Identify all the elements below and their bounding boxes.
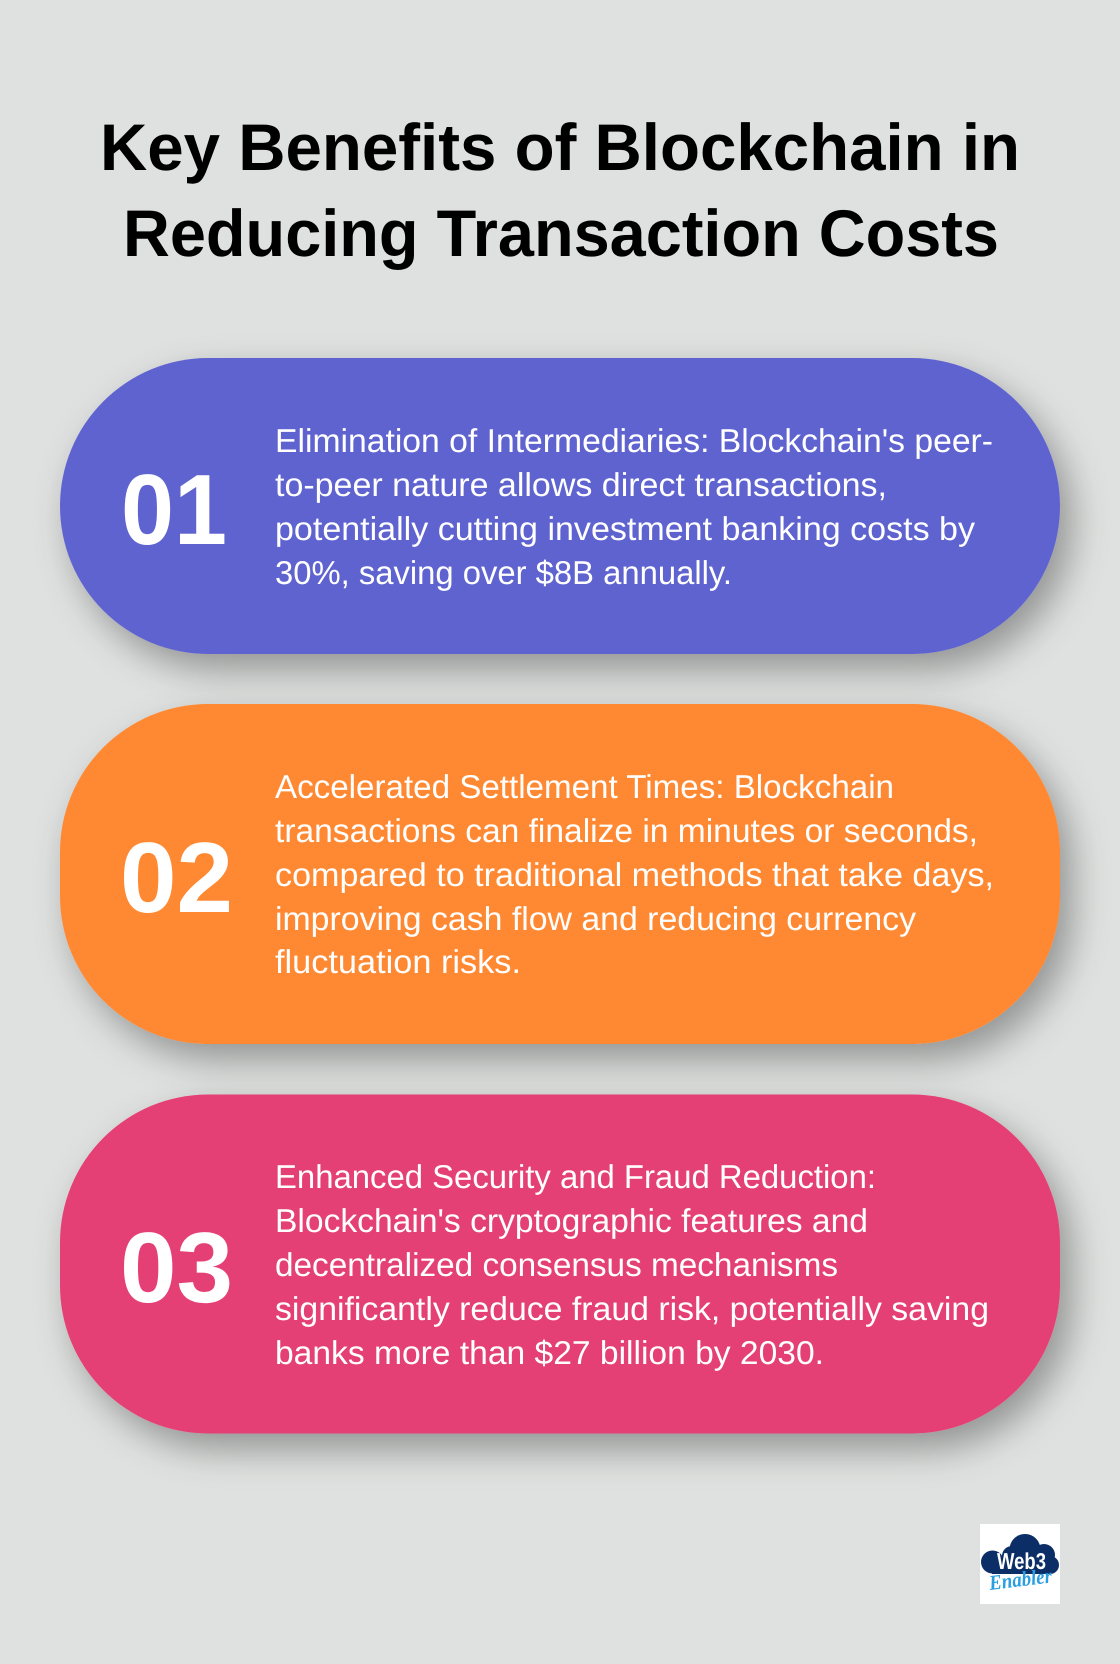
wordmark: Enabler: Enabler xyxy=(987,1563,1054,1595)
number 03: 03 xyxy=(120,1212,233,1324)
title: Reducing Transaction Costs xyxy=(123,196,999,270)
body text 2: improving cash flow and reducing currency xyxy=(275,900,916,937)
icon: cloud xyxy=(981,1534,1059,1574)
body text 2: fluctuation risks. xyxy=(275,943,521,980)
body text 2 xyxy=(275,768,994,980)
panel: enhanced security and fraud reduction xyxy=(60,1094,1060,1434)
body text 3: significantly reduce fraud risk, potentially saving xyxy=(275,1290,989,1327)
body text 3 xyxy=(275,1158,989,1371)
body text 1: potentially cutting investment banking costs by xyxy=(275,510,976,547)
panel: elimination of intermediaries xyxy=(60,358,1060,654)
body text 2: Accelerated Settlement Times: Blockchain xyxy=(275,768,894,805)
body text 2: transactions can finalize in minutes or seconds, xyxy=(275,812,978,849)
title: Key Benefits of Blockchain in xyxy=(100,110,1020,184)
panel: accelerated settlement times xyxy=(60,704,1060,1044)
logo: Web3 Enabler xyxy=(980,1524,1060,1604)
body text 3: banks more than $27 billion by 2030. xyxy=(275,1334,824,1371)
pill background: pink xyxy=(60,1094,1060,1434)
pill background: orange xyxy=(60,704,1060,1044)
body text 1: 30%, saving over $8B annually. xyxy=(275,554,732,591)
body text 3: decentralized consensus mechanisms xyxy=(275,1246,838,1283)
number 02: 02 xyxy=(120,822,233,934)
wordmark: Web3: Web3 xyxy=(997,1548,1046,1574)
body text 1 xyxy=(275,422,993,591)
body text 1: Elimination of Intermediaries: Blockchain's peer- xyxy=(275,422,993,459)
body text 3: Enhanced Security and Fraud Reduction: xyxy=(275,1158,876,1195)
body text 3: Blockchain's cryptographic features and xyxy=(275,1202,868,1239)
number 01: 01 xyxy=(121,454,227,566)
body text 2: compared to traditional methods that take days, xyxy=(275,856,994,893)
body text 1: to-peer nature allows direct transactions, xyxy=(275,466,887,503)
title xyxy=(100,110,1020,270)
pill background: purple xyxy=(60,358,1060,654)
